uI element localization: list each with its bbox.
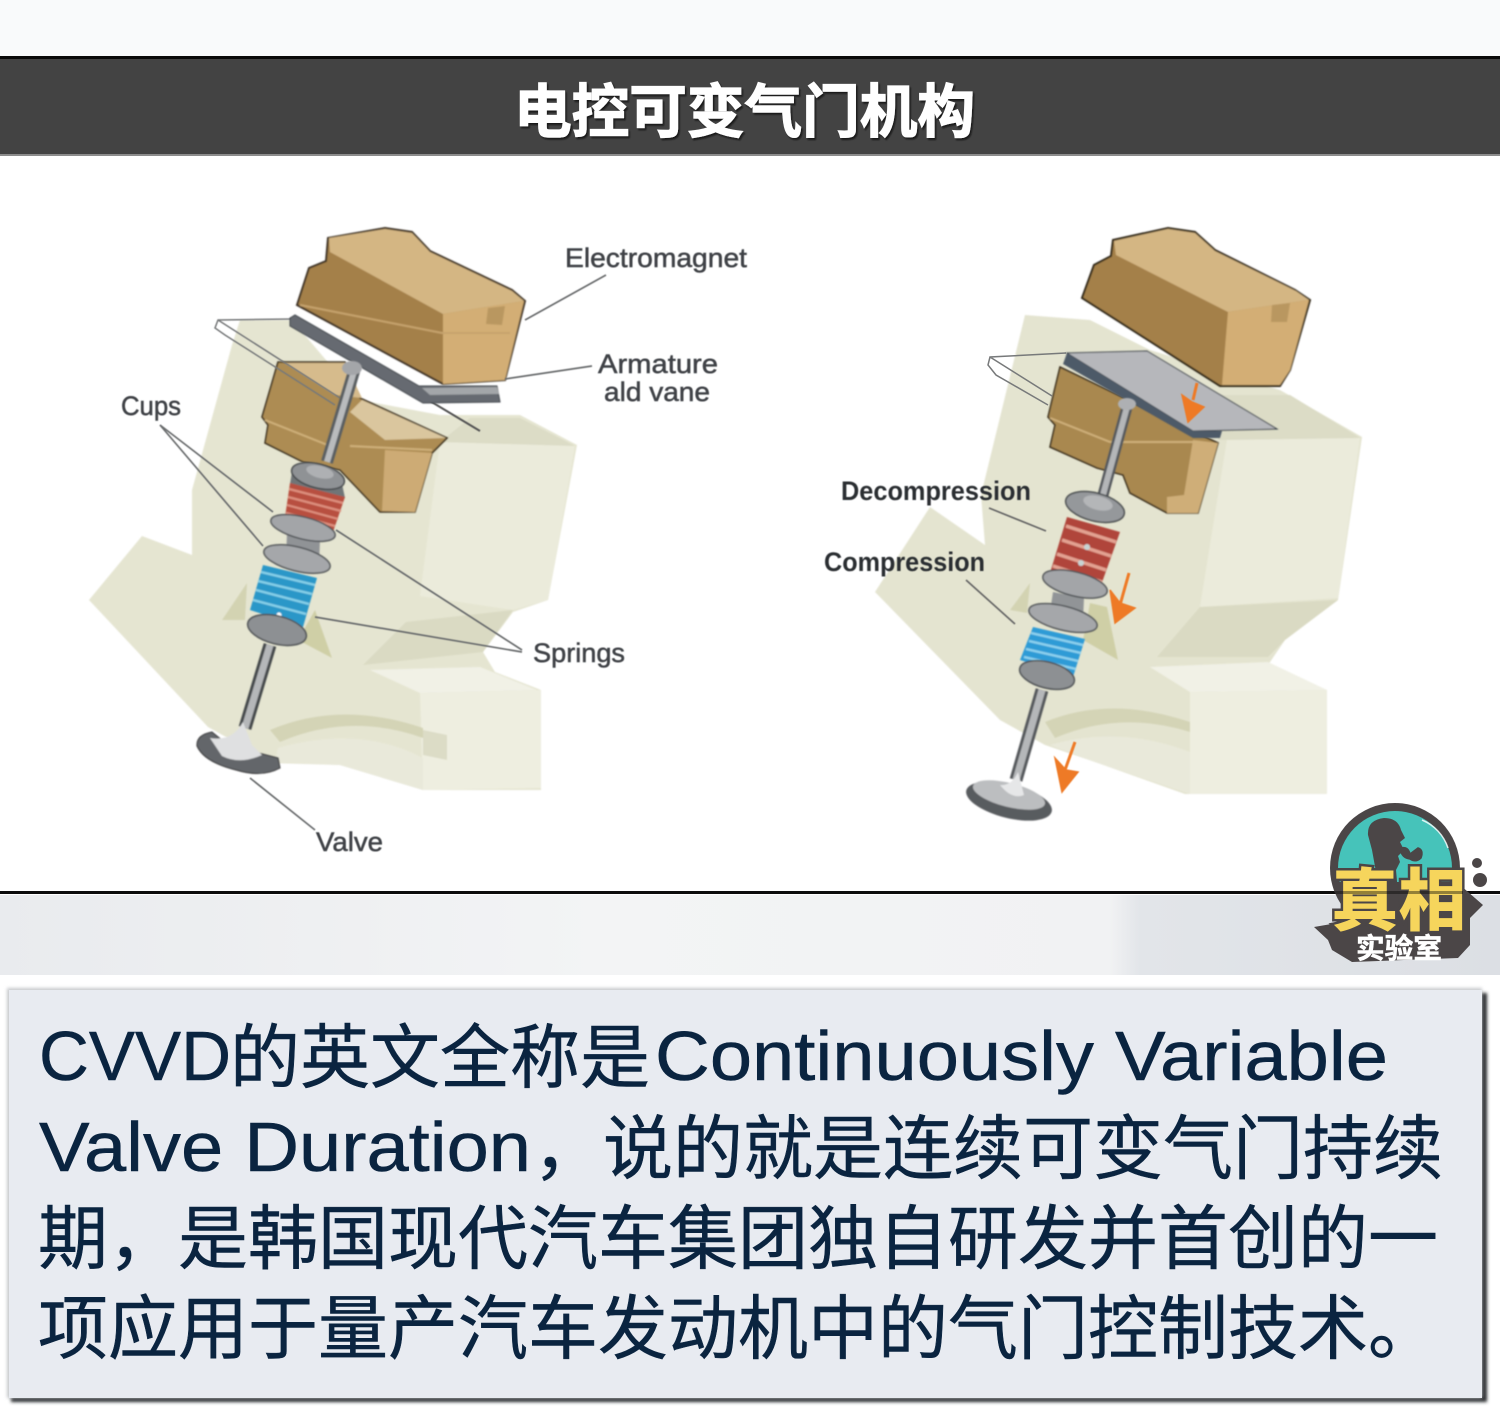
valve head (197, 732, 280, 774)
armature plate, lowered (1063, 351, 1277, 438)
logo: 真相实验室 (1314, 803, 1487, 967)
description text: 的英文全称是 (230, 1002, 650, 1103)
label: Electromagnet: Electromagnet (565, 243, 748, 273)
description text: CVVD (39, 1017, 231, 1095)
blue spring (250, 565, 317, 627)
upper stem (327, 368, 355, 462)
leader lines (160, 275, 606, 830)
valve stem and spring stack (197, 361, 362, 774)
diagram: right valve assembly (824, 228, 1362, 828)
middle cups (286, 533, 320, 566)
description text: 期，是韩国现代汽车集团独自研发并首创的一 (38, 1183, 1438, 1284)
lower cup (1017, 656, 1077, 694)
label: Armature and vane: ald vane (604, 377, 710, 407)
top cup (1063, 486, 1127, 528)
logo subtitle: 实验室 (1356, 927, 1442, 967)
description text (38, 1002, 1443, 1374)
engine head body (875, 315, 1362, 794)
leader lines (966, 508, 1046, 624)
lower band (0, 895, 1500, 975)
red spring (1050, 517, 1120, 588)
logo detective silhouette (1368, 818, 1422, 915)
upper electromagnet (1082, 228, 1310, 386)
valve head (962, 774, 1056, 828)
label: Valve: Valve (316, 827, 383, 857)
middle cups (1050, 592, 1084, 620)
description text: ，说的就是连续可变气门持续 (533, 1093, 1443, 1194)
lower cup (245, 609, 309, 651)
label: Armature and vane (598, 349, 718, 407)
lower stem (1016, 690, 1042, 780)
description text: Continuously Variable (655, 1017, 1388, 1095)
arrow: plate down (1182, 383, 1204, 422)
engine head body (89, 320, 577, 790)
panel: description (7, 988, 1487, 1402)
blue spring (1020, 627, 1085, 677)
red spring (285, 483, 345, 532)
top cup (290, 472, 345, 498)
wire outline of armature travel (215, 319, 480, 431)
labels (824, 476, 1031, 577)
top band (0, 0, 1500, 56)
valve stem and spring stack (962, 398, 1136, 828)
armature plate (290, 315, 500, 403)
label: Decompression: Decompression (841, 476, 1031, 506)
logo wordmark: 真相 (1331, 846, 1466, 945)
motion arrows (1055, 383, 1204, 792)
label: Armature and vane: Armature (598, 349, 718, 379)
label: Springs: Springs (533, 638, 625, 668)
upper electromagnet (297, 228, 525, 384)
label: Compression: Compression (824, 547, 985, 577)
lower stem (245, 645, 270, 728)
arrow: spring down (1110, 573, 1135, 623)
upper stem (1103, 407, 1127, 495)
description text: 项应用于量产汽车发动机中的气门控制技术。 (38, 1273, 1438, 1374)
heading: 电控可变气门机构 (514, 65, 975, 149)
lower electromagnet (1048, 367, 1218, 513)
arrow: valve down (1055, 742, 1078, 792)
header bar (0, 56, 1500, 156)
lower electromagnet (262, 362, 447, 512)
description text: Valve Duration (39, 1108, 531, 1186)
logo dial (1330, 803, 1460, 933)
labels (121, 243, 748, 857)
logo banner (1314, 885, 1483, 962)
wire outline of armature travel (988, 353, 1066, 405)
logo dots (1472, 858, 1482, 868)
label: Cups: Cups (121, 391, 181, 421)
diagram: left valve assembly (89, 228, 748, 857)
